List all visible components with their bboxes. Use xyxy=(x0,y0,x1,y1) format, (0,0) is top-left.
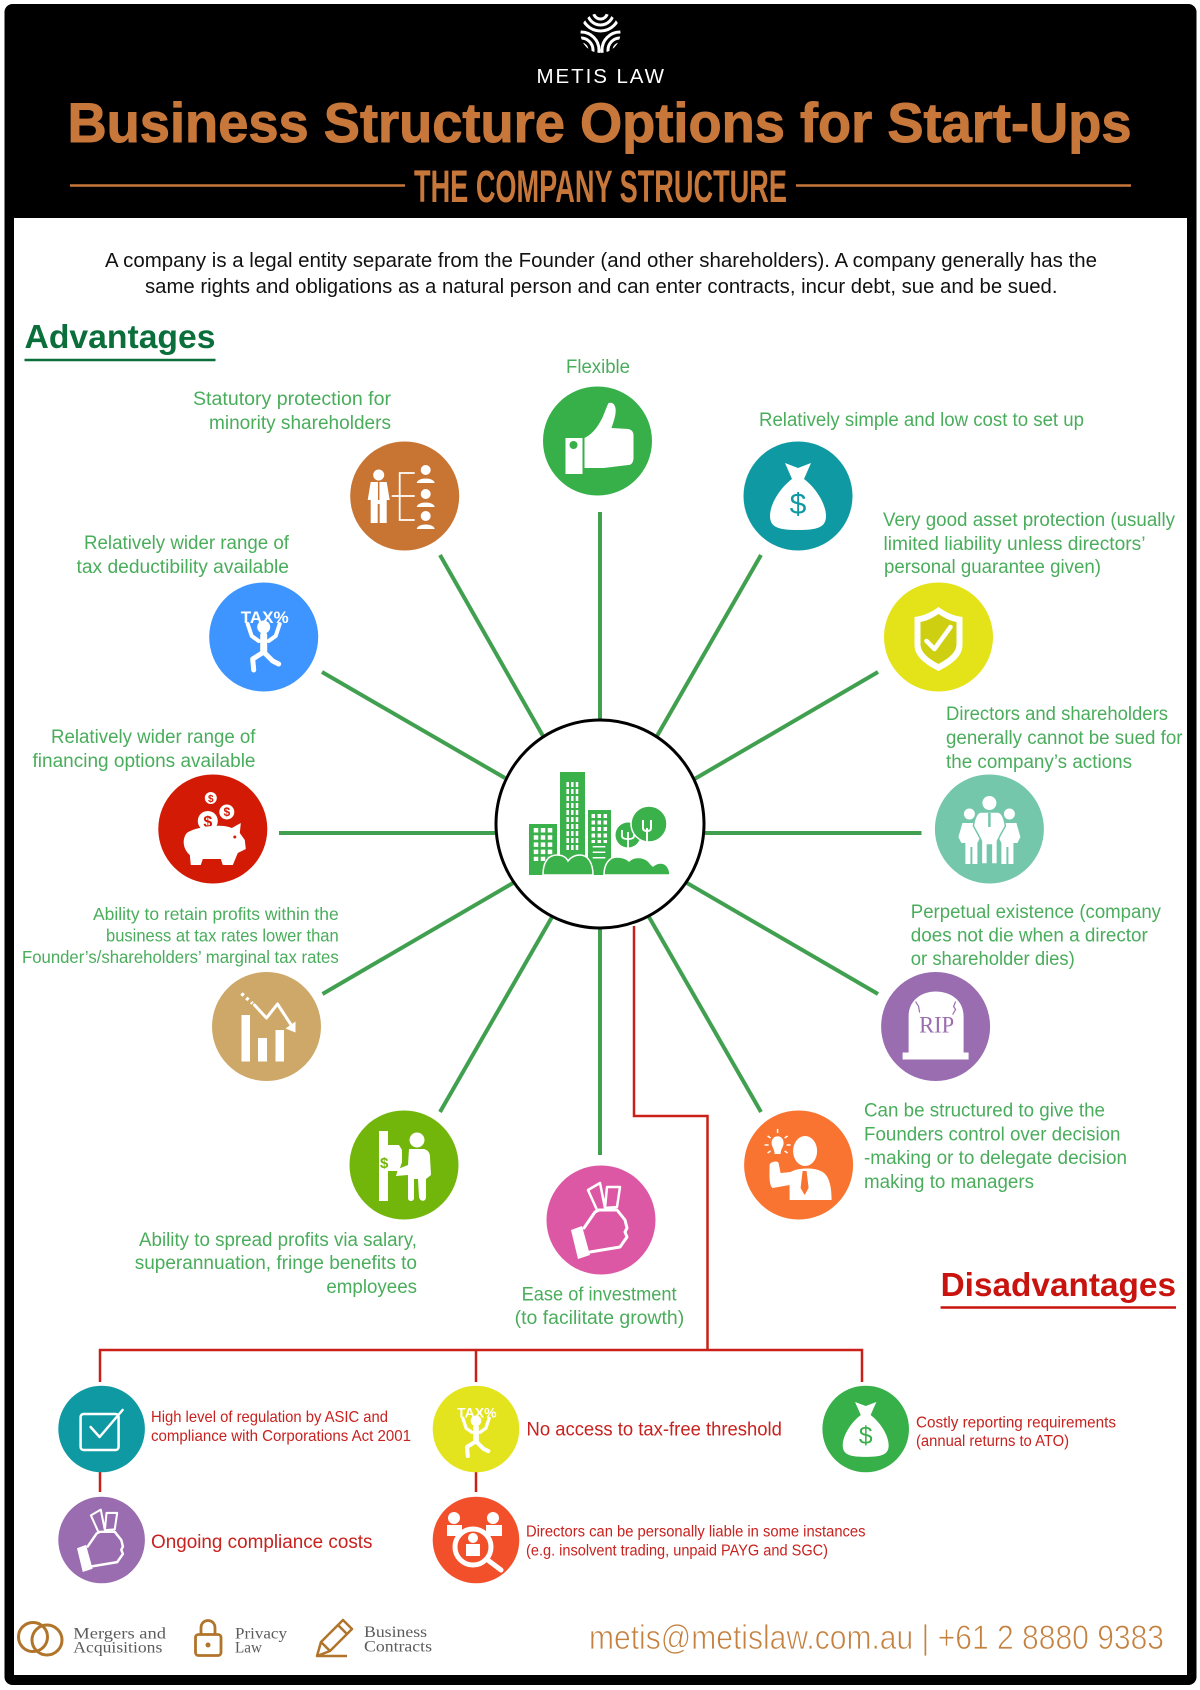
service: Business Contracts xyxy=(317,1620,432,1656)
label xyxy=(864,1101,1127,1193)
icon: man lifting tax: TAX% xyxy=(457,1405,497,1421)
label: (e.g. insolvent trading, unpaid PAYG and SGC) xyxy=(526,1543,828,1560)
label xyxy=(193,389,392,434)
label: Founders control over decision xyxy=(864,1125,1120,1146)
footer xyxy=(18,1619,1164,1657)
icon: piggy bank xyxy=(158,774,267,884)
label: business at tax rates lower than xyxy=(106,926,339,946)
service: Business Contracts: Business xyxy=(364,1624,427,1641)
icon: person with light bulb xyxy=(744,1110,853,1220)
label: Ongoing compliance costs xyxy=(151,1532,372,1553)
service: Mergers and Acquisitions: Acquisitions xyxy=(73,1640,162,1656)
label xyxy=(151,1409,411,1445)
label: personal guarantee given) xyxy=(884,557,1101,578)
brand name: METIS LAW xyxy=(536,65,665,88)
advantage: ease of investment xyxy=(515,1166,684,1329)
advantage: tax deductibility xyxy=(76,533,318,692)
label: Directors can be personally liable in some instances xyxy=(526,1524,866,1541)
icon: money bag xyxy=(744,442,852,550)
icon: hand holding money xyxy=(58,1497,145,1583)
service: Privacy Law xyxy=(196,1620,287,1656)
connector spokes xyxy=(279,512,922,1155)
label: Statutory protection for xyxy=(193,389,392,410)
label: the company’s actions xyxy=(946,752,1132,773)
label: Ability to spread profits via salary, xyxy=(139,1230,417,1251)
service: Mergers and Acquisitions: Mergers and xyxy=(73,1626,166,1642)
label: Relatively wider range of xyxy=(51,727,256,748)
advantage: minority shareholders xyxy=(193,389,459,550)
label xyxy=(76,533,290,578)
service: Business Contracts: Contracts xyxy=(364,1638,432,1656)
label: Founder’s/shareholders’ marginal tax rates xyxy=(22,947,339,967)
label: financing options available xyxy=(32,751,255,772)
label: Directors and shareholders xyxy=(946,704,1168,725)
label: Very good asset protection (usually xyxy=(883,510,1175,531)
intro text xyxy=(105,250,1097,298)
icon: man lifting tax: TAX% xyxy=(241,608,289,627)
icon: Metis Law logo xyxy=(580,14,620,53)
label xyxy=(946,704,1183,773)
label: Ease of investment xyxy=(522,1285,677,1306)
intro text: same rights and obligations as a natural person and can enter contracts, incur debt, sue and be sued. xyxy=(145,276,1058,298)
title: Business Structure Options for Start-Ups xyxy=(68,91,1132,154)
label: Relatively simple and low cost to set up xyxy=(759,410,1084,431)
label: No access to tax-free threshold xyxy=(526,1420,782,1441)
icon: person at cash machine: $ xyxy=(380,1155,389,1172)
icon: checkbox xyxy=(58,1386,145,1472)
disadvantage: regulation xyxy=(58,1386,411,1472)
label xyxy=(32,727,256,772)
icon: falling bar chart xyxy=(212,972,321,1081)
subtitle: THE COMPANY STRUCTURE xyxy=(414,161,787,212)
heading: Disadvantages: Disadvantages xyxy=(941,1266,1176,1303)
icon: org chart xyxy=(350,442,459,550)
advantage: asset protection xyxy=(883,510,1175,692)
icon: hand holding money xyxy=(546,1166,656,1274)
label: tax deductibility available xyxy=(76,557,289,578)
disadvantages connector xyxy=(100,926,862,1492)
label xyxy=(135,1230,417,1298)
label: minority shareholders xyxy=(209,413,391,434)
icon: magnifier over people xyxy=(433,1497,519,1583)
icon: RIP tombstone: RIP xyxy=(919,1012,954,1038)
label xyxy=(911,902,1161,970)
label: limited liability unless directors’ xyxy=(884,534,1146,555)
service: Privacy Law: Law xyxy=(235,1640,262,1656)
label xyxy=(883,510,1175,578)
icon: city buildings and trees xyxy=(529,772,670,875)
label: Costly reporting requirements xyxy=(916,1414,1116,1432)
icon: money bag: $ xyxy=(859,1423,873,1450)
label: employees xyxy=(326,1277,417,1298)
icon: piggy bank: $ xyxy=(223,805,230,819)
icon: shield with tick xyxy=(884,582,993,692)
service: Privacy Law: Privacy xyxy=(235,1626,287,1642)
icon: man lifting tax xyxy=(209,582,318,692)
label xyxy=(526,1524,866,1560)
central hub xyxy=(496,720,704,928)
advantage: simple and low cost xyxy=(744,410,1084,550)
label xyxy=(916,1414,1116,1450)
advantage: financing options xyxy=(32,727,267,884)
label: Perpetual existence (company xyxy=(911,902,1161,923)
label: Ability to retain profits within the xyxy=(93,904,339,924)
label: (annual returns to ATO) xyxy=(916,1433,1069,1450)
label: making to managers xyxy=(864,1172,1034,1193)
icon: man lifting tax xyxy=(433,1386,519,1472)
advantage: perpetual existence xyxy=(881,902,1161,1081)
advantage: spread profits xyxy=(135,1110,458,1298)
icon: money bag: $ xyxy=(790,488,807,521)
icon: group of directors xyxy=(935,774,1044,884)
label: Relatively wider range of xyxy=(84,533,290,554)
advantage: founders control xyxy=(744,1101,1127,1220)
icon: RIP tombstone xyxy=(881,972,990,1081)
label: or shareholder dies) xyxy=(911,949,1075,970)
label: Flexible xyxy=(566,357,630,378)
label: High level of regulation by ASIC and xyxy=(151,1409,388,1426)
heading: Advantages: Advantages xyxy=(24,318,216,355)
disadvantage: reporting requirements xyxy=(822,1386,1116,1472)
icon: piggy bank: $ xyxy=(208,794,214,805)
label xyxy=(22,904,339,967)
disadvantage: director liability xyxy=(433,1497,866,1583)
service: Mergers and Acquisitions xyxy=(18,1622,166,1656)
label: generally cannot be sued for xyxy=(946,728,1183,749)
icon: money bag xyxy=(822,1386,909,1472)
icon: thumbs up xyxy=(543,386,652,496)
icon: piggy bank: $ xyxy=(203,814,212,831)
header xyxy=(70,14,1131,202)
advantage: retain profits xyxy=(22,904,339,1081)
disadvantage: tax-free threshold xyxy=(433,1386,782,1472)
icon: person at cash machine xyxy=(350,1110,458,1220)
intro text: A company is a legal entity separate from the Founder (and other shareholders). A company generally has the xyxy=(105,250,1097,272)
advantage: Flexible xyxy=(543,357,652,496)
label: -making or to delegate decision xyxy=(864,1148,1127,1169)
advantage: directors not sued xyxy=(935,704,1183,884)
label: Can be structured to give the xyxy=(864,1101,1105,1122)
label: does not die when a director xyxy=(911,926,1148,947)
label: superannuation, fringe benefits to xyxy=(135,1253,417,1274)
label: (to facilitate growth) xyxy=(515,1308,684,1329)
disadvantage: compliance costs xyxy=(58,1497,373,1583)
label: compliance with Corporations Act 2001 xyxy=(151,1428,411,1445)
label xyxy=(515,1285,684,1329)
